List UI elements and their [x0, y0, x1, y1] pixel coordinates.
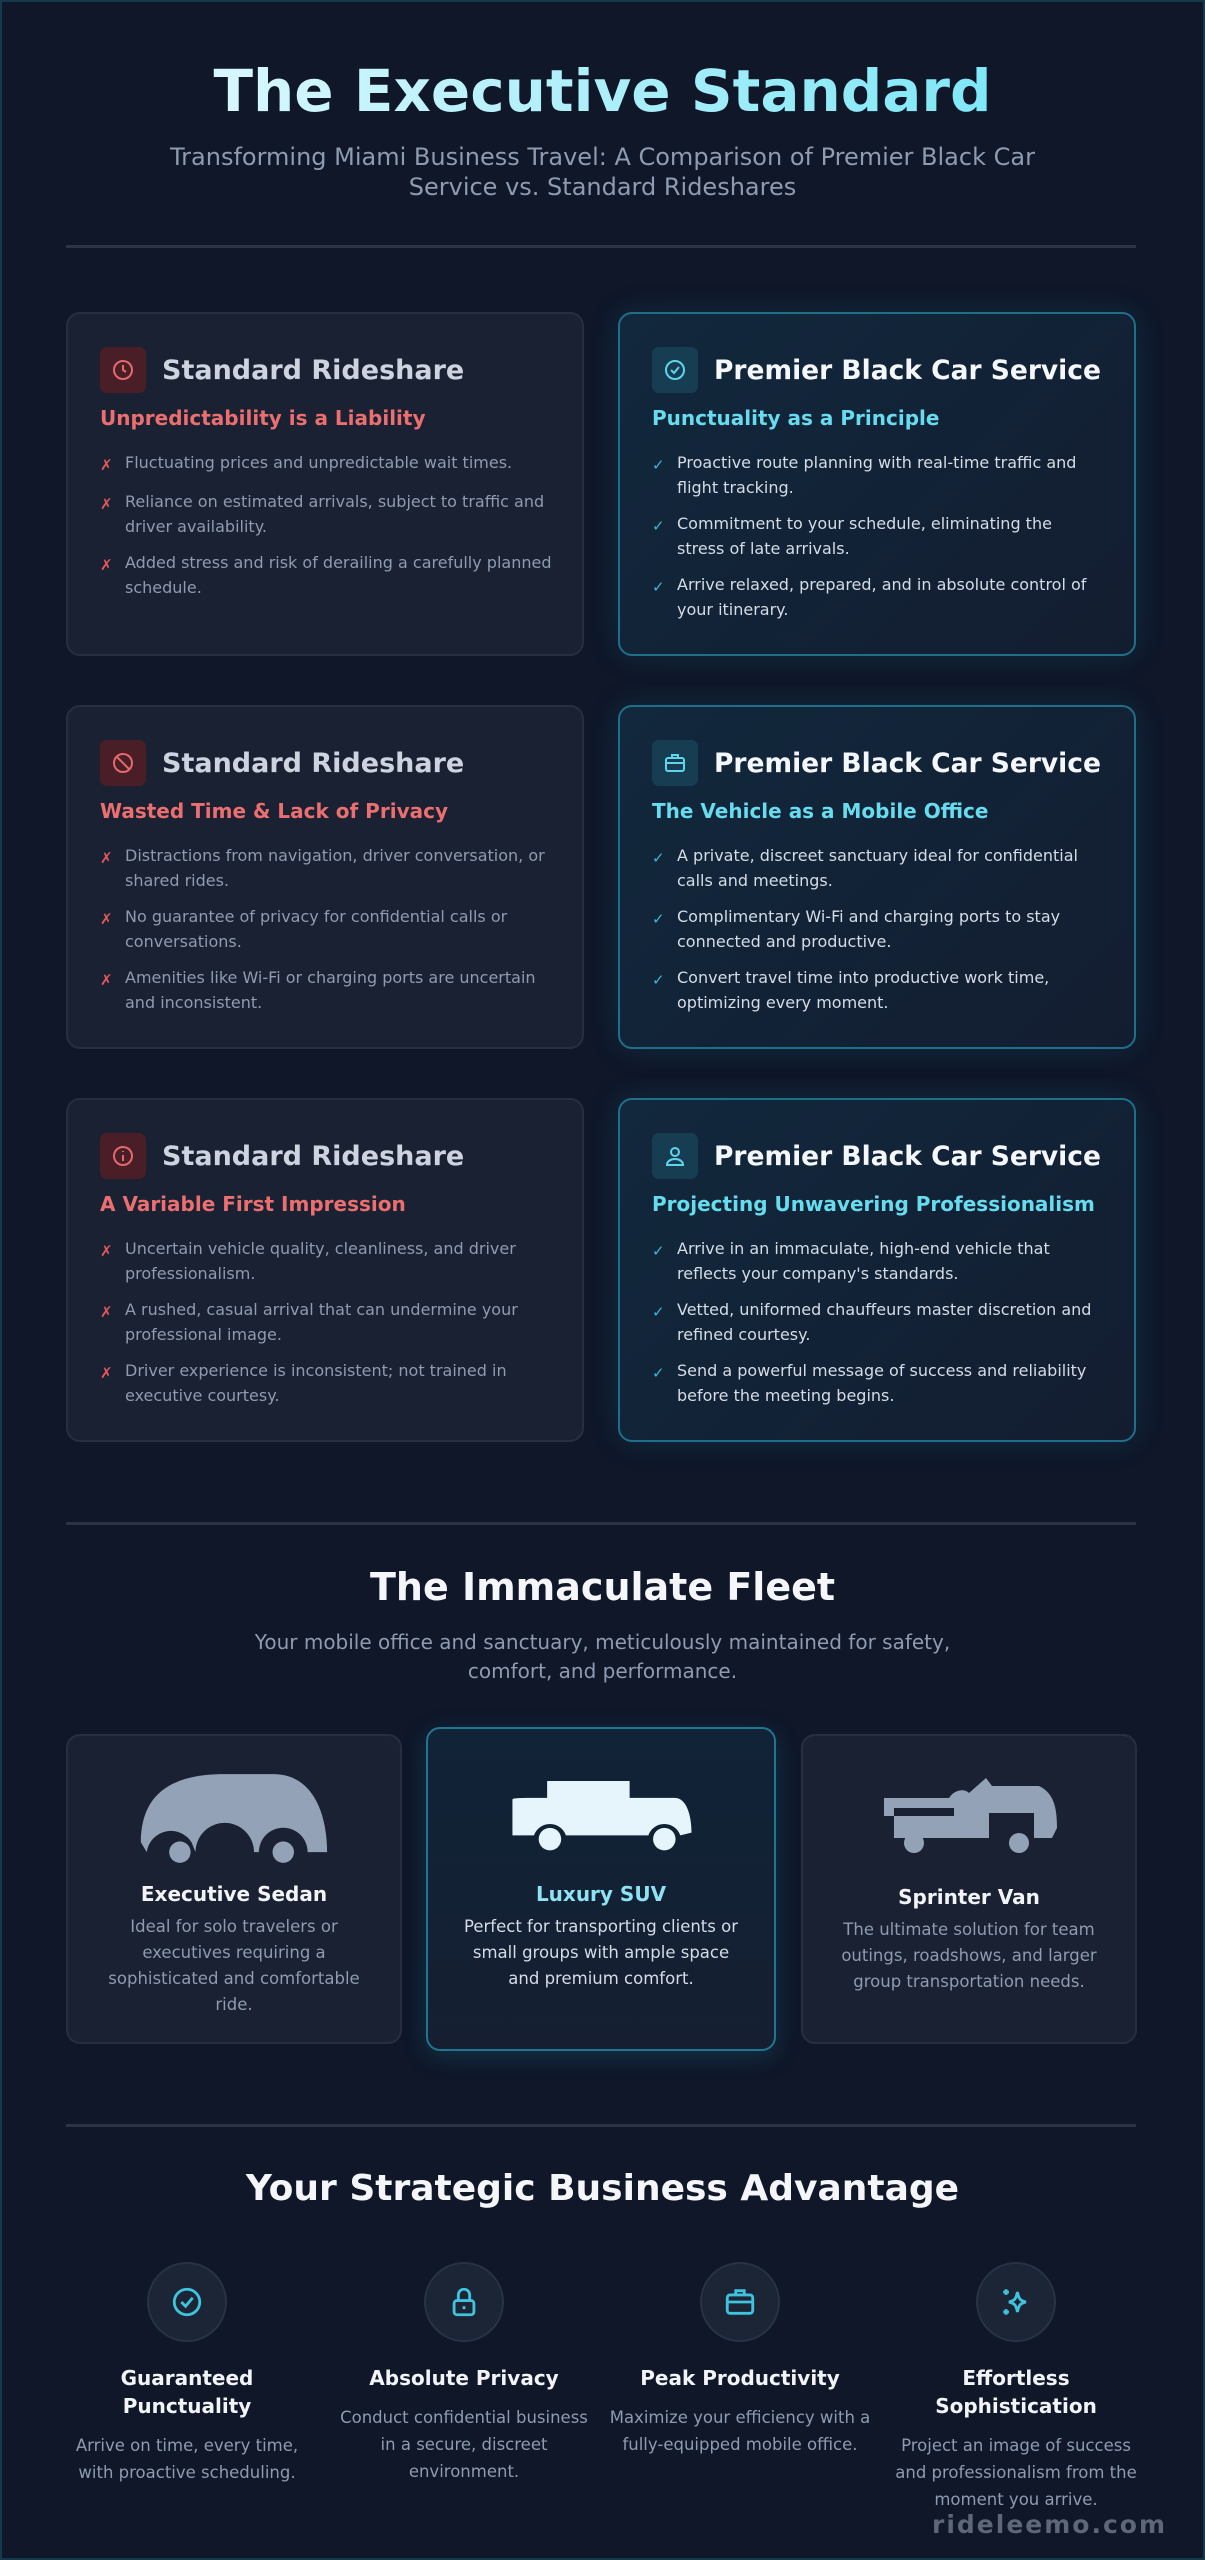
bullet list: ✗ — [100, 495, 113, 513]
panel: premier mobile office — [618, 705, 1136, 1049]
bullet list: ✗ — [100, 1364, 113, 1382]
advantage: productivity: Peak Productivity — [640, 2366, 840, 2390]
bullet list: ✓ — [652, 578, 665, 596]
panel: luxury suv — [426, 1727, 776, 2051]
panel: premier professionalism — [618, 1098, 1136, 1442]
panel: luxury suv: Luxury SUV — [536, 1882, 666, 1906]
subheading: Unpredictability is a Liability — [100, 406, 426, 430]
advantage: sophistication — [895, 2262, 1137, 2509]
bullet list — [652, 453, 1087, 619]
icon: briefcase: Premier Black Car Service — [714, 748, 1101, 778]
bullet list: Proactive route planning with real-time traffic and flight tracking. — [677, 453, 1076, 497]
bullet list: ✓ — [652, 910, 665, 928]
panel: executive sedan — [66, 1734, 402, 2044]
bullet list: ✗ — [100, 1242, 113, 1260]
subheading: The Vehicle as a Mobile Office — [652, 799, 988, 823]
bullet list — [100, 846, 545, 1012]
bullet list: Convert travel time into productive work time, optimizing every moment. — [677, 968, 1049, 1012]
bullet list: ✗ — [100, 556, 113, 574]
bullet list: ✗ — [100, 456, 113, 474]
bullet list: ✗ — [100, 1303, 113, 1321]
icon: check — [147, 2262, 227, 2342]
icon: clock — [100, 347, 464, 393]
advantage: punctuality: Arrive on time, every time, with proactive scheduling. — [76, 2436, 298, 2482]
bullet list: ✗ — [100, 971, 113, 989]
panel: rideshare punctuality — [66, 312, 584, 656]
panel: sprinter van — [801, 1734, 1137, 2044]
icon: lock — [424, 2262, 504, 2342]
subheading: Wasted Time & Lack of Privacy — [100, 799, 448, 823]
panel: premier punctuality — [618, 312, 1136, 656]
bullet list: ✓ — [652, 1303, 665, 1321]
bullet list: Commitment to your schedule, eliminating the stress of late arrivals. — [677, 514, 1052, 558]
bullet list: ✓ — [652, 456, 665, 474]
icon: ban — [100, 740, 464, 786]
bullet list: Fluctuating prices and unpredictable wait times. — [125, 453, 512, 472]
bullet list: Arrive in an immaculate, high-end vehicle that reflects your company's standards. — [677, 1239, 1050, 1283]
advantage: privacy: Conduct confidential business in a secure, discreet environment. — [340, 2408, 588, 2481]
subheading: Projecting Unwavering Professionalism — [652, 1192, 1095, 1216]
advantage: productivity: Maximize your efficiency with a fully-equipped mobile office. — [610, 2408, 870, 2454]
bullet list: Complimentary Wi-Fi and charging ports to stay connected and productive. — [677, 907, 1060, 951]
bullet list: Distractions from navigation, driver conversation, or shared rides. — [125, 846, 545, 890]
icon: sedan — [140, 1774, 328, 1863]
panel: luxury suv: Perfect for transporting clients or small groups with ample space and premium comfort. — [464, 1917, 738, 1988]
advantage: punctuality: Guaranteed Punctuality — [121, 2366, 253, 2418]
subheading: Punctuality as a Principle — [652, 406, 939, 430]
bullet list: ✓ — [652, 1242, 665, 1260]
subtitle: Transforming Miami Business Travel: A Comparison of Premier Black Car Service vs. Standard Rideshares — [170, 143, 1035, 201]
bullet list: ✓ — [652, 517, 665, 535]
icon: info — [100, 1133, 464, 1179]
advantage heading: Your Strategic Business Advantage — [246, 2168, 959, 2209]
title — [0, 57, 1205, 125]
icon: sparkles — [976, 2262, 1056, 2342]
bullet list: Added stress and risk of derailing a carefully planned schedule. — [125, 553, 551, 597]
bullet list: ✓ — [652, 971, 665, 989]
panel: sprinter van: Sprinter Van — [898, 1885, 1040, 1909]
subheading: A Variable First Impression — [100, 1192, 406, 1216]
icon: briefcase — [652, 740, 1101, 786]
bullet list: Send a powerful message of success and reliability before the meeting begins. — [677, 1361, 1086, 1405]
bullet list: A rushed, casual arrival that can undermine your professional image. — [125, 1300, 518, 1344]
panel: sprinter van: The ultimate solution for team outings, roadshows, and larger group transportation needs. — [841, 1920, 1097, 1991]
bullet list: Reliance on estimated arrivals, subject to traffic and driver availability. — [125, 492, 544, 536]
bullet list — [100, 1239, 518, 1405]
panel: executive sedan: Ideal for solo travelers or executives requiring a sophisticated and comfortable ride. — [108, 1917, 360, 2014]
bullet list — [100, 453, 551, 597]
icon: user: Premier Black Car Service — [714, 1140, 1101, 1172]
bullet list: ✗ — [100, 910, 113, 928]
bullet list: Amenities like Wi-Fi or charging ports are uncertain and inconsistent. — [125, 968, 536, 1012]
bullet list — [652, 846, 1078, 1012]
panel: executive sedan: Executive Sedan — [141, 1882, 327, 1906]
bullet list: Uncertain vehicle quality, cleanliness, and driver professionalism. — [125, 1239, 516, 1283]
icon: clock: Standard Rideshare — [162, 354, 464, 386]
footer brand: rideleemo.com — [932, 2510, 1167, 2539]
icon: info: Standard Rideshare — [162, 1140, 464, 1172]
bullet list: No guarantee of privacy for confidential calls or conversations. — [125, 907, 507, 951]
bullet list: Vetted, uniformed chauffeurs master discretion and refined courtesy. — [677, 1300, 1091, 1344]
advantage: privacy: Absolute Privacy — [369, 2366, 559, 2390]
advantage: privacy — [340, 2262, 588, 2481]
advantage: sophistication: Project an image of success and professionalism from the moment you arrive. — [895, 2436, 1137, 2509]
icon: van — [884, 1778, 1057, 1853]
advantage: punctuality — [76, 2262, 298, 2482]
fleet subtitle: Your mobile office and sanctuary, meticulously maintained for safety, comfort, and performance. — [255, 1630, 950, 1683]
icon: user — [652, 1133, 1101, 1179]
bullet list: A private, discreet sanctuary ideal for confidential calls and meetings. — [677, 846, 1078, 890]
advantage: sophistication: Effortless Sophistication — [935, 2366, 1097, 2418]
panel: rideshare privacy — [66, 705, 584, 1049]
icon: suv — [512, 1781, 692, 1850]
advantage: productivity — [610, 2262, 870, 2454]
bullet list: ✓ — [652, 849, 665, 867]
bullet list: ✗ — [100, 849, 113, 867]
bullet list: Driver experience is inconsistent; not trained in executive courtesy. — [125, 1361, 507, 1405]
bullet list: ✓ — [652, 1364, 665, 1382]
fleet heading: The Immaculate Fleet — [370, 1565, 835, 1609]
bullet list — [652, 1239, 1091, 1405]
title: The Executive Standard — [213, 57, 992, 125]
icon: ban: Standard Rideshare — [162, 748, 464, 778]
icon: check circle — [652, 347, 1101, 393]
icon: check circle: Premier Black Car Service — [714, 354, 1101, 386]
bullet list: Arrive relaxed, prepared, and in absolute control of your itinerary. — [677, 575, 1086, 619]
icon: briefcase — [700, 2262, 780, 2342]
panel: rideshare impression — [66, 1098, 584, 1442]
